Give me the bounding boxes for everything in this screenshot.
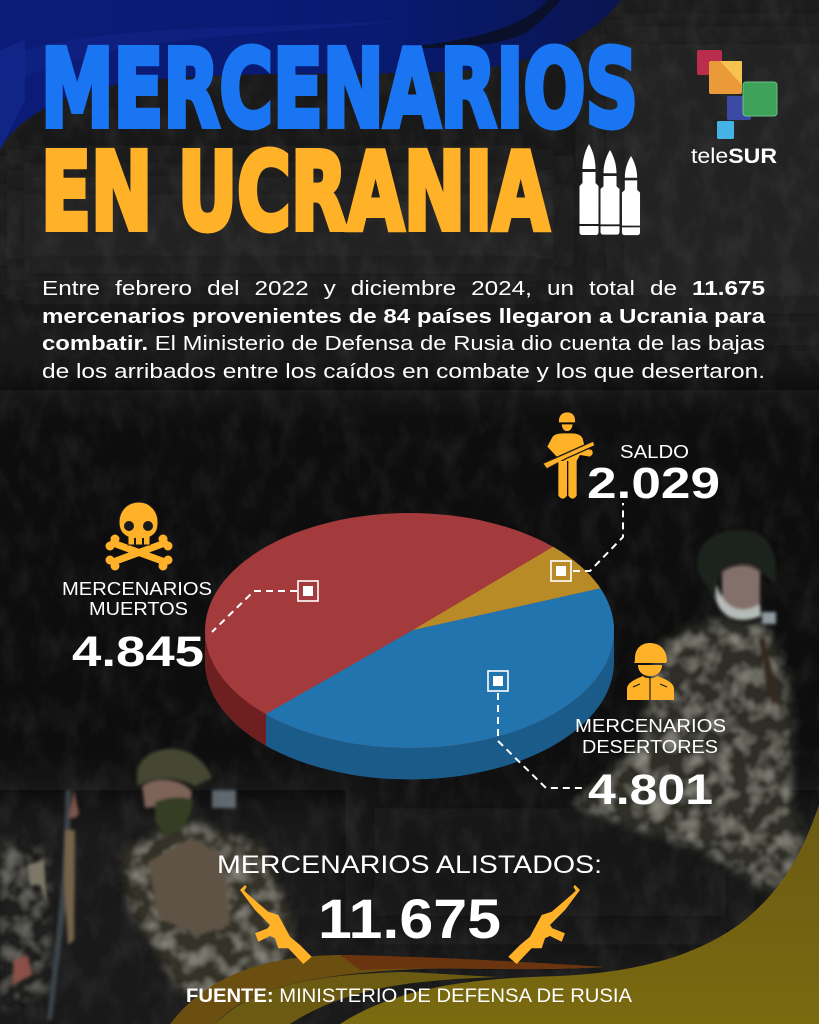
label: mercenarios muertos: MERCENARIOS (62, 578, 212, 599)
pie side: desertores and muertos (205, 634, 614, 780)
logo: teleSUR: teleSUR (691, 145, 777, 168)
intro paragraph (42, 277, 766, 383)
logo: teleSUR (691, 50, 777, 168)
label: mercenarios muertos (62, 578, 212, 619)
label: mercenarios desertores: DESERTORES (582, 736, 718, 757)
blue flag wave top-left (0, 0, 621, 150)
icon: skull and crossbones (106, 502, 172, 570)
value: 4.801: 4.801 (588, 766, 713, 814)
pie chart (205, 513, 614, 780)
icon: soldier with rifle (543, 412, 595, 499)
label: mercenarios muertos: MUERTOS (89, 598, 188, 619)
soldier photo right (570, 530, 804, 905)
icon: rifle right (508, 885, 580, 964)
icon: rifle left (240, 885, 312, 964)
intro paragraph: combatir. El Ministerio de Defensa de Rusia dio cuenta de las bajas (42, 332, 765, 355)
intro paragraph: mercenarios provenientes de 84 países llegaron a Ucrania para (42, 305, 766, 328)
connector: muertos (212, 591, 297, 632)
intro paragraph: de los arribados entre los caídos en combate y los que desertaron. (42, 360, 765, 383)
value: 11.675: 11.675 (318, 887, 501, 950)
label: saldo: SALDO (620, 441, 689, 462)
marker: desertores (488, 671, 508, 691)
marker: saldo (551, 561, 571, 581)
intro paragraph: Entre febrero del 2022 y diciembre 2024, un total de 11.675 (42, 277, 765, 300)
icon: bullets (580, 144, 640, 235)
source line: FUENTE: MINISTERIO DE DEFENSA DE RUSIA (186, 986, 632, 1007)
heading: mercenarios alistados: MERCENARIOS ALISTADOS: (217, 851, 602, 879)
connector: saldo (573, 503, 623, 571)
label: mercenarios desertores (575, 715, 726, 757)
icon: soldier bust (627, 643, 674, 700)
pie top slices (205, 513, 614, 748)
title: EN UCRANIA: EN UCRANIA (41, 131, 549, 255)
connector: desertores (498, 693, 582, 788)
marker: muertos (298, 581, 318, 601)
value: 2.029: 2.029 (587, 459, 720, 508)
soldier photo left (0, 749, 292, 1020)
value: 4.845: 4.845 (72, 628, 204, 676)
yellow flag wave bottom-right (170, 805, 819, 1024)
label: mercenarios desertores: MERCENARIOS (575, 715, 726, 736)
